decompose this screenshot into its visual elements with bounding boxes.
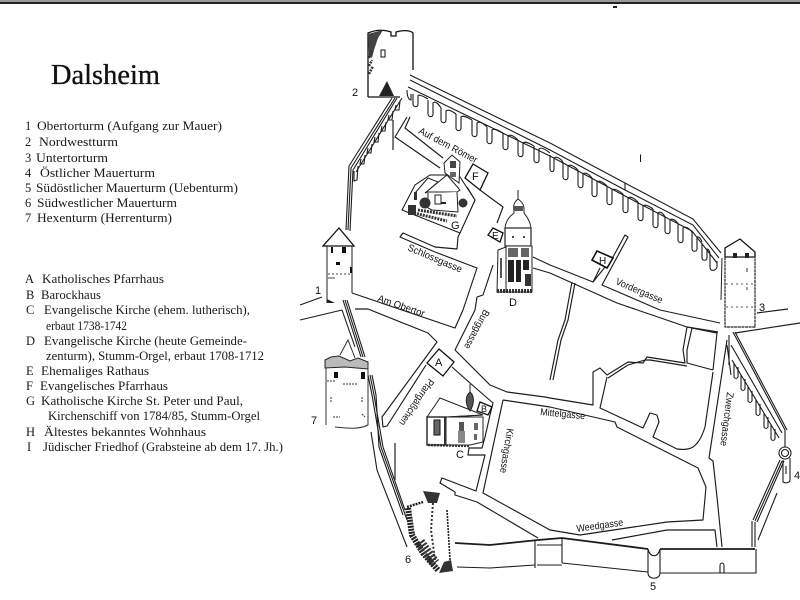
- street names: Burggasse: [461, 308, 491, 351]
- legend: buildings: H: [26, 425, 35, 439]
- street names: Kirchgasse: [497, 428, 515, 474]
- map letter labels: H: [599, 256, 606, 267]
- map letter labels: C: [456, 449, 464, 461]
- legend: buildings: Ehemaliges Rathaus: [41, 364, 149, 378]
- church D: Evangelische Kirche: [497, 190, 532, 292]
- legend: buildings: F: [26, 379, 33, 393]
- legend: buildings: Evangelische Kirche (ehem. lutherisch),: [44, 303, 250, 317]
- west wall lower: [342, 300, 407, 547]
- legend: buildings: E: [26, 364, 34, 378]
- legend: towers: Hexenturm (Herrenturm): [37, 211, 172, 225]
- map letter labels: I: [639, 153, 642, 165]
- street names: Pfarrgäßchen: [396, 376, 436, 427]
- map: town wall: [342, 75, 791, 578]
- legend: towers: Obertorturm (Aufgang zur Mauer): [37, 119, 222, 133]
- scan edge at top: [0, 0, 800, 8]
- legend: towers: 5: [25, 181, 31, 195]
- legend: towers: 4: [25, 166, 32, 180]
- street names: Auf dem Römer: [417, 126, 480, 166]
- west wall upper: [346, 98, 402, 231]
- legend: towers: 7: [25, 211, 31, 225]
- tower number labels: 6: [405, 554, 411, 566]
- legend: buildings: C: [26, 303, 34, 317]
- map letter labels: D: [509, 297, 517, 309]
- legend: buildings: B: [26, 288, 34, 302]
- legend: towers: Südöstlicher Mauerturm (Uebenturm): [36, 181, 238, 195]
- tower number labels: 3: [759, 302, 765, 314]
- legend: towers: 6: [25, 196, 31, 210]
- legend: buildings: G: [26, 394, 35, 408]
- church G: Katholische Kirche St. Peter und Paul: [402, 155, 475, 233]
- legend: buildings: Kirchenschiff von 1784/85, Stumm-Orgel: [48, 409, 261, 423]
- tower number labels: [311, 87, 800, 593]
- legend: towers: 3: [25, 151, 31, 165]
- map letter labels: B: [481, 404, 487, 414]
- legend: buildings: Jüdischer Friedhof (Grabsteine ab dem 17. Jh.): [43, 440, 283, 454]
- map letter labels: G: [451, 220, 460, 232]
- street names: Weedgasse: [576, 517, 624, 535]
- street names: Mittelgasse: [540, 407, 586, 422]
- north wall: [407, 75, 721, 270]
- map letter labels: F: [472, 171, 479, 183]
- legend: towers: 1: [25, 119, 31, 133]
- legend: towers: 2: [25, 135, 31, 149]
- church C: Evangelische Kirche: [427, 384, 483, 446]
- tower 2: Nordwestturm: [368, 30, 413, 97]
- tower 1: Obertorturm: [323, 228, 354, 303]
- tower number labels: 2: [352, 87, 358, 99]
- map letter labels: E: [492, 231, 499, 242]
- legend: buildings: Evangelisches Pfarrhaus: [40, 379, 168, 393]
- east wall: [727, 332, 791, 547]
- legend: towers: [25, 119, 238, 225]
- map: street network: [300, 117, 800, 547]
- legend: buildings: [25, 272, 283, 454]
- street names: Vordergasse: [614, 277, 665, 306]
- street names: Zwerchgasse: [717, 392, 735, 447]
- legend: buildings: I: [27, 440, 31, 454]
- tower 7: Hexenturm: [325, 340, 368, 428]
- legend: towers: Nordwestturm: [39, 135, 118, 149]
- legend: buildings: Evangelische Kirche (heute Gemeinde-: [44, 334, 247, 348]
- tower 3: Untertorturm: [721, 239, 755, 327]
- building boxes A B E F H: [427, 164, 613, 415]
- map letter labels: [435, 153, 642, 461]
- legend: towers: Untertorturm: [36, 151, 108, 165]
- street names: Am Obertor: [376, 293, 427, 320]
- legend: buildings: Barockhaus: [41, 288, 101, 302]
- legend: buildings: erbaut 1738-1742: [46, 319, 127, 333]
- legend: buildings: A: [25, 272, 34, 286]
- south wall: [455, 538, 756, 578]
- legend: buildings: zenturm), Stumm-Orgel, erbaut 1708-1712: [46, 349, 264, 363]
- legend: buildings: Katholisches Pfarrhaus: [42, 272, 164, 286]
- map letter labels: A: [435, 357, 443, 369]
- tower number labels: 5: [650, 581, 656, 593]
- tower number labels: 1: [315, 285, 321, 297]
- legend: towers: Südwestlicher Mauerturm: [37, 196, 177, 210]
- street names: Schlossgasse: [406, 243, 464, 276]
- legend: towers: Östlicher Mauerturm: [40, 166, 155, 180]
- legend: buildings: Katholische Kirche St. Peter und Paul,: [41, 394, 243, 408]
- tower number labels: 4: [794, 470, 800, 482]
- tower number labels: 7: [311, 415, 317, 427]
- legend: buildings: Ältestes bekanntes Wohnhaus: [44, 425, 206, 439]
- title: Dalsheim: [51, 59, 160, 91]
- street names: [376, 126, 735, 535]
- legend: buildings: D: [26, 334, 35, 348]
- tower 6: Südwestlicher Mauerturm: [407, 491, 453, 573]
